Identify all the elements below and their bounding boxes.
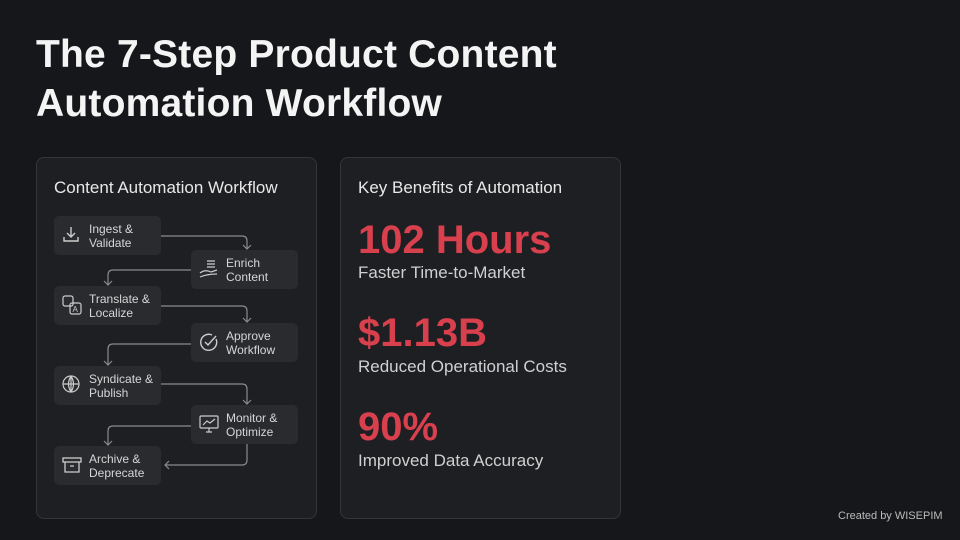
step: translate: Localize bbox=[89, 306, 133, 320]
step: translate: Translate & bbox=[89, 292, 150, 306]
step: monitor: Optimize bbox=[226, 425, 273, 439]
panel: benefits: 90% bbox=[358, 405, 438, 449]
step: monitor bbox=[191, 405, 298, 444]
arrows bbox=[104, 235, 252, 470]
heading: workflow: Content Automation Workflow bbox=[54, 178, 278, 197]
step: archive: Archive & bbox=[89, 452, 140, 466]
step: syndicate bbox=[54, 366, 161, 405]
panel: benefits: Reduced Operational Costs bbox=[358, 357, 567, 376]
title bbox=[36, 33, 557, 125]
step: archive bbox=[54, 446, 161, 485]
step: approve: Workflow bbox=[226, 343, 275, 357]
panel: benefits: $1.13B bbox=[358, 311, 487, 355]
step: translate bbox=[54, 286, 161, 325]
step: approve: Approve bbox=[226, 329, 271, 343]
stat: costs bbox=[358, 311, 567, 376]
step: monitor: Monitor & bbox=[226, 411, 277, 425]
step: ingest bbox=[54, 216, 161, 255]
stat: accuracy bbox=[358, 405, 544, 470]
panel: benefits: Improved Data Accuracy bbox=[358, 451, 543, 470]
stat: hours bbox=[358, 218, 551, 282]
step: enrich bbox=[191, 250, 298, 289]
title: The 7-Step Product Content bbox=[36, 33, 557, 76]
title: Automation Workflow bbox=[36, 82, 442, 125]
step: syndicate: Publish bbox=[89, 386, 128, 400]
step: ingest: Validate bbox=[89, 236, 131, 250]
step: ingest: Ingest & bbox=[89, 222, 133, 236]
step: archive: Deprecate bbox=[89, 466, 144, 480]
step: enrich: Content bbox=[226, 270, 268, 284]
step: syndicate: Syndicate & bbox=[89, 372, 153, 386]
step: enrich: Enrich bbox=[226, 256, 260, 270]
panel: benefits: Faster Time-to-Market bbox=[358, 263, 525, 282]
panel: benefits: 102 Hours bbox=[358, 218, 551, 262]
credit: Created by WISEPIM bbox=[838, 510, 943, 522]
step: translate: A bbox=[72, 305, 78, 314]
panel: workflow bbox=[36, 157, 317, 519]
heading: benefits: Key Benefits of Automation bbox=[358, 178, 562, 197]
panel: benefits bbox=[340, 157, 621, 519]
step: approve bbox=[191, 323, 298, 362]
